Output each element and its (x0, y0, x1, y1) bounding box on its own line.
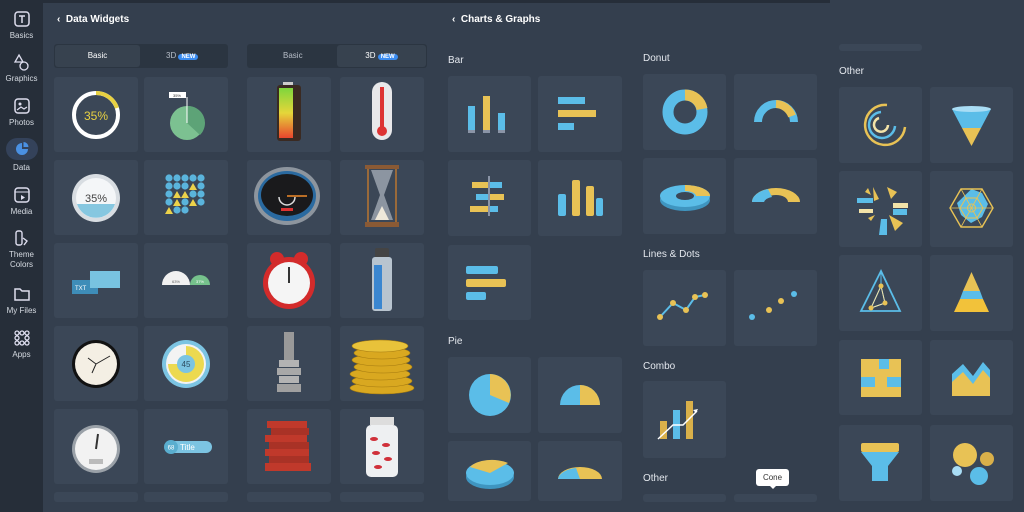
tile: 3D donut (643, 158, 726, 234)
tile: 3D half pie (538, 441, 622, 501)
tile: bottle (340, 243, 424, 318)
tile: pictogram (144, 160, 228, 235)
tile: bubbles (930, 425, 1013, 501)
tile: TXT boxes: TXT (75, 286, 87, 292)
section: Donut: Donut (643, 53, 670, 64)
sidebar (0, 0, 43, 512)
tile: hourglass (340, 160, 424, 235)
tile: donut (643, 74, 726, 150)
tile: ring 35% (54, 77, 138, 152)
nav: Data active (6, 138, 38, 172)
tile: triangle radar (839, 255, 922, 331)
tile: area chart (930, 340, 1013, 415)
nav: Photos: Photos (9, 118, 34, 127)
tile: scatter (734, 270, 817, 346)
tooltip: Cone: Cone (763, 473, 782, 482)
section: Bar: Bar (448, 55, 464, 66)
tile: 3D vertical bars (538, 160, 622, 236)
tile: half donuts: 37% (196, 279, 204, 284)
tile: 45 timer: 45 (182, 360, 191, 369)
tile: 45 timer (144, 326, 228, 401)
tile: pie with flag (144, 77, 228, 152)
tile: pyramid (930, 255, 1013, 331)
tile: alarm clock (247, 243, 331, 318)
tile: radial arcs (839, 87, 922, 163)
tooltip: Cone (756, 469, 789, 486)
tile: 3D half donut (734, 158, 817, 234)
nav: Apps: Apps (12, 350, 31, 359)
nav: Apps (12, 330, 31, 359)
basic widgets grid (54, 77, 228, 502)
tile: half donut (734, 74, 817, 150)
tabs: Basic/3D right: 3D NEW (365, 51, 395, 60)
tile: speedometer (247, 160, 331, 235)
section: Other (middle): Other (643, 473, 668, 484)
nav: Theme Colors (9, 230, 34, 269)
column: Other right (839, 44, 922, 51)
tile: treemap (839, 340, 922, 415)
tile: clock (54, 326, 138, 401)
nav: Theme Colors: Theme (9, 250, 34, 259)
nav: Data active: Data (13, 163, 30, 172)
tile: line chart (643, 270, 726, 346)
tile: coins (340, 326, 424, 401)
tile: 68 Title: 68 (168, 446, 175, 452)
tile: combo chart (643, 381, 726, 458)
tile: vertical bars (448, 76, 531, 152)
tile: bolt & nuts (247, 326, 331, 401)
tile: diverging bars (448, 160, 531, 236)
nav: Theme Colors: Colors (10, 260, 33, 269)
tile: gauge 35% (54, 160, 138, 235)
tile: 3D horizontal bars (448, 245, 531, 320)
nav: Basics: Basics (10, 31, 33, 40)
tile: speedo white (54, 409, 138, 484)
tile: pill jar (340, 409, 424, 484)
3D widgets grid (247, 77, 424, 502)
tile: pie (448, 357, 531, 433)
section: Combo: Combo (643, 361, 675, 372)
tile: ring 35%: 35% (84, 109, 108, 123)
tile: 3D pie (448, 441, 531, 501)
tile: cone (930, 87, 1013, 163)
tile: hexagon radar (930, 171, 1013, 247)
tabs: Basic/3D right: Basic (283, 51, 303, 60)
tile: pie with flag: 35% (173, 93, 181, 98)
tile: 68 Title (144, 409, 228, 484)
section: Pie: Pie (448, 336, 462, 347)
tile: thermometer (340, 77, 424, 152)
nav: Photos (9, 98, 34, 127)
nav: Media: Media (11, 207, 32, 216)
tile: TXT boxes (54, 243, 138, 318)
tabs: Basic/3D left (54, 44, 228, 68)
tile: horizontal bars (538, 76, 622, 152)
tile: funnel (839, 425, 922, 501)
tile: battery (247, 77, 331, 152)
tabs: Basic/3D right (247, 44, 427, 68)
nav: My Files: My Files (7, 306, 36, 315)
tabs: Basic/3D left: Basic (88, 51, 107, 60)
tile: radial bars (839, 171, 922, 247)
nav: Graphics (5, 54, 38, 83)
heading: Charts & Graphs: ‹ Charts & Graphs (452, 14, 540, 25)
nav: Basics (10, 11, 33, 40)
tile: gauge 35%: 35% (85, 193, 107, 205)
tile: 68 Title: Title (180, 443, 195, 452)
section: Lines & Dots: Lines & Dots (643, 249, 700, 260)
nav: My Files (7, 288, 36, 315)
tile: half donuts (144, 243, 228, 318)
nav: Graphics: Graphics (5, 74, 38, 83)
tile: half pie (538, 357, 622, 433)
nav: Media (11, 187, 32, 216)
tile: half donuts: 63% (172, 279, 180, 284)
heading: Data Widgets: ‹ Data Widgets (57, 14, 129, 25)
text: Other (839, 66, 864, 77)
tile: books (247, 409, 331, 484)
tabs: Basic/3D left: 3D NEW (166, 51, 195, 60)
